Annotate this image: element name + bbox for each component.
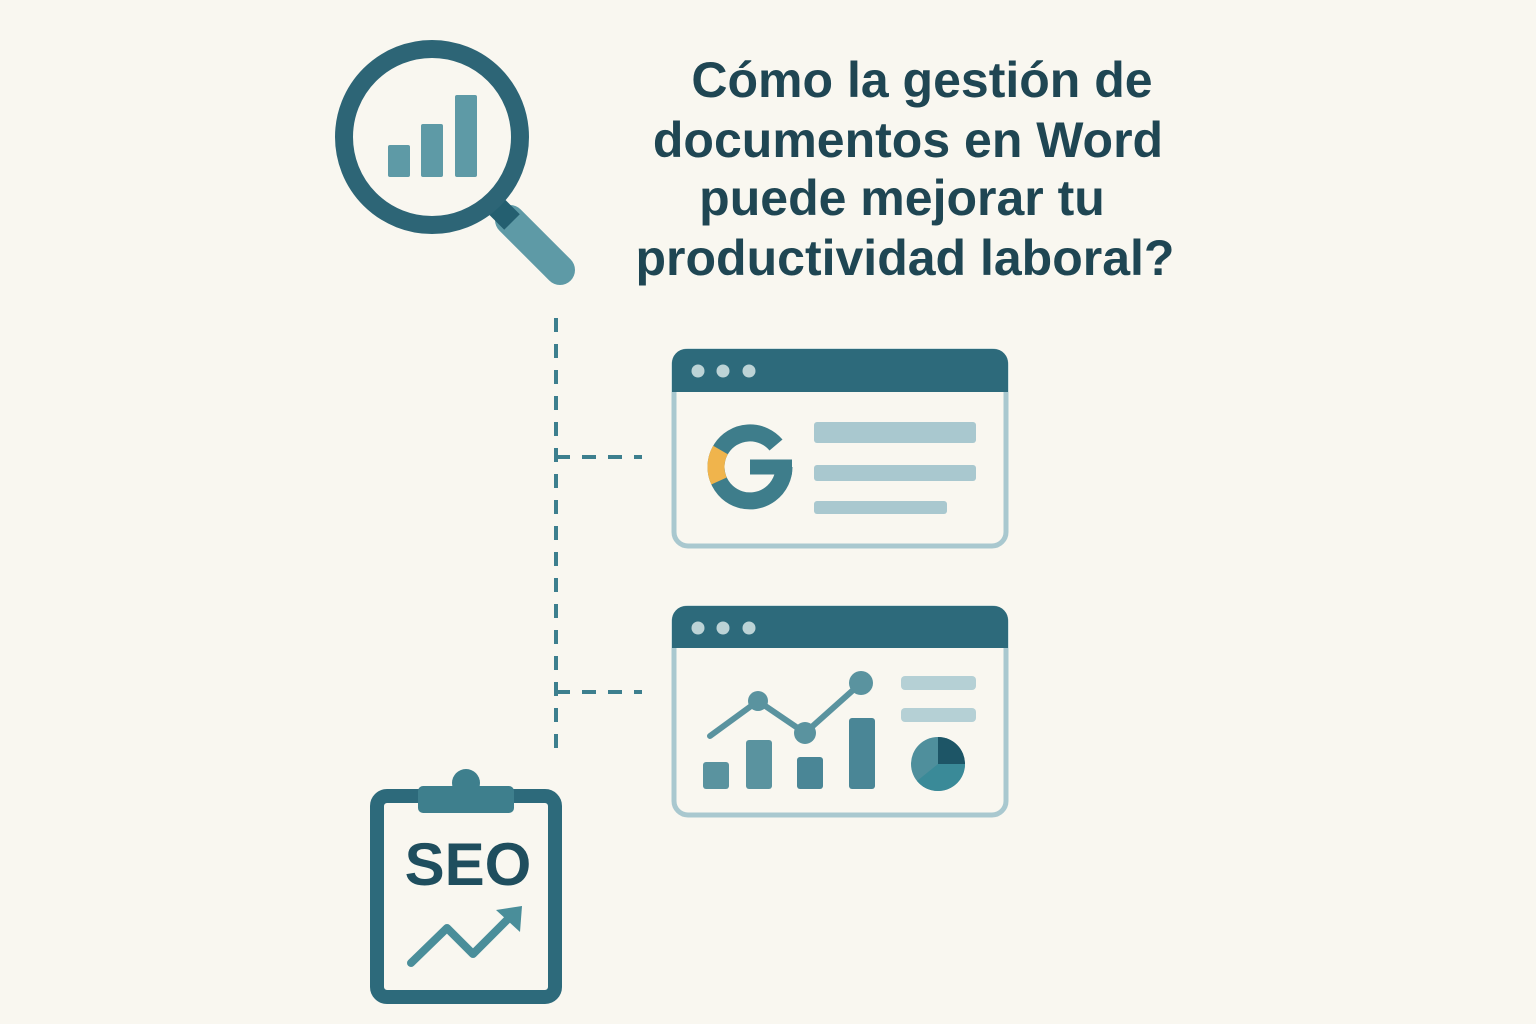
icon: SEO clipboard xyxy=(377,769,555,997)
pie chart xyxy=(911,737,965,791)
panel: analytics window xyxy=(672,606,1008,815)
icon: SEO clipboard: SEO xyxy=(405,831,531,898)
title xyxy=(636,52,1174,286)
line chart xyxy=(710,671,873,744)
title: productividad laboral? xyxy=(636,230,1174,286)
bar chart xyxy=(703,718,875,789)
panel: search window xyxy=(672,349,1008,546)
icon: magnifying glass xyxy=(344,49,560,270)
title: puede mejorar tu xyxy=(699,170,1105,226)
icon: G logo xyxy=(716,433,792,501)
title: documentos en Word xyxy=(653,112,1163,168)
title: Cómo la gestión de xyxy=(691,52,1153,108)
connector dashed lines xyxy=(556,318,642,755)
